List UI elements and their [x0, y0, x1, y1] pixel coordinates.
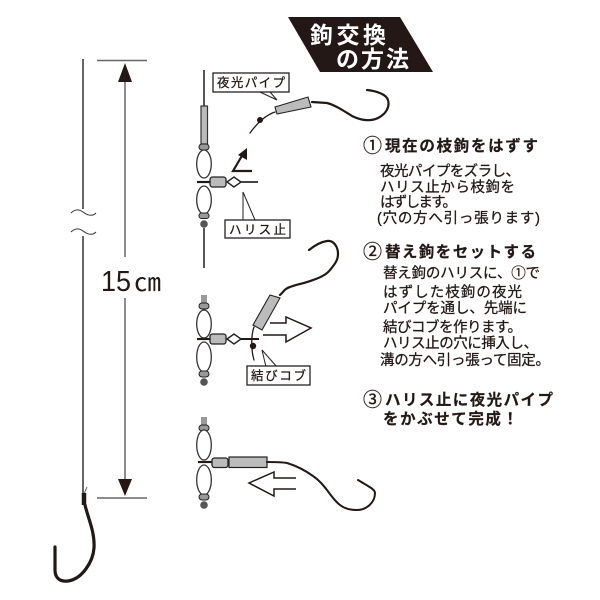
label: luminous pipe: 夜光パイプ	[217, 76, 285, 90]
step 1: (穴の方へ引っ張ります)	[377, 210, 540, 227]
step 2: ハリス止の穴に挿入し、	[383, 335, 538, 352]
step 2: 替え鉤のハリスに、①で	[383, 265, 540, 282]
title banner	[288, 17, 433, 72]
full hook with 15 cm line	[55, 59, 96, 581]
step 3: ③	[363, 389, 382, 411]
dimension arrow: 15 cm: 15	[101, 266, 131, 298]
arrow: pull hook away	[233, 148, 252, 171]
label: knot: 結びコブ	[251, 368, 306, 383]
step 1: 現在の枝鉤をはずす	[385, 136, 538, 155]
diagram 1: removing the branch hook	[197, 70, 389, 268]
step 1: はずします。	[380, 194, 457, 211]
step 2: 替え鉤をセットする	[385, 243, 536, 261]
arrow: push left	[249, 472, 296, 496]
step 2: パイプを通し、先端に	[383, 300, 527, 317]
step 3: ハリス止に夜光パイプ	[385, 391, 553, 409]
diagram 2: setting the replacement hook	[197, 241, 338, 386]
dimension arrow: 15 cm	[97, 60, 161, 498]
step 2: はずした枝鉤の夜光	[383, 284, 522, 301]
step 2	[363, 241, 550, 369]
step 1: ハリス止から枝鉤を	[380, 179, 515, 196]
step 1	[363, 135, 540, 227]
step 3	[363, 389, 553, 428]
label: harisu stopper	[225, 192, 290, 238]
step 2: ②	[363, 241, 382, 263]
label: luminous pipe	[213, 73, 289, 100]
arrow: pull right	[263, 317, 311, 342]
title banner: の方法	[336, 46, 409, 72]
step 1: 夜光パイプをズラし、	[380, 163, 520, 180]
step 2: 溝の方へ引っ張って固定。	[380, 352, 550, 369]
diagram 3: pipe covered and finished	[197, 417, 375, 510]
label: harisu stopper: ハリス止	[229, 223, 286, 237]
step 3: をかぶせて完成！	[383, 409, 518, 428]
step 1: ①	[363, 135, 382, 157]
label: knot	[247, 350, 310, 385]
step 2: 結びコブを作ります。	[383, 318, 522, 336]
dimension arrow: 15 cm: ㎝	[134, 269, 161, 297]
title banner: 鉤交換	[310, 22, 386, 48]
